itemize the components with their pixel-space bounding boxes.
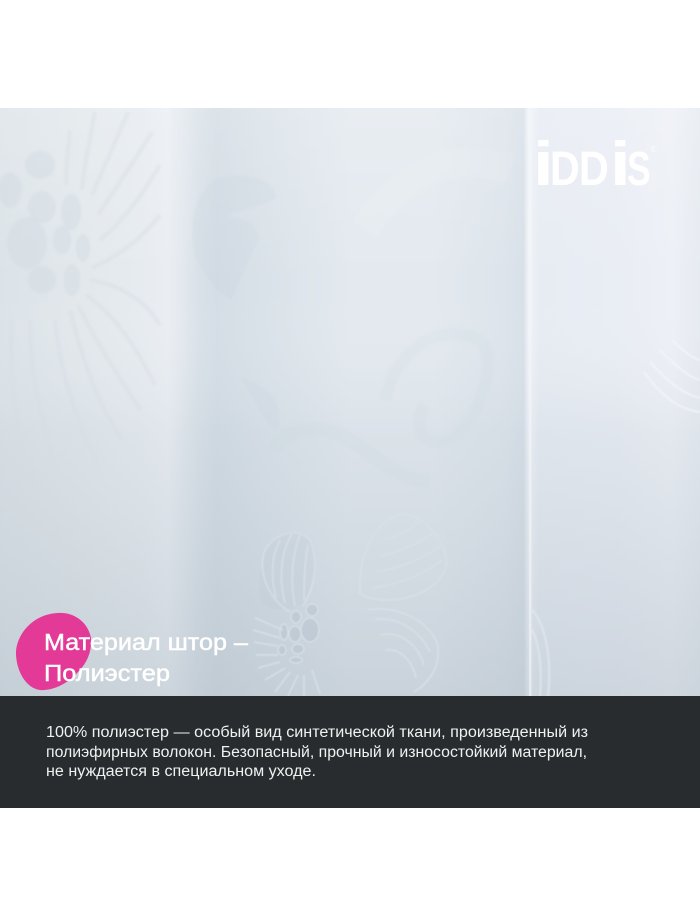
- description text: 100% полиэстер — особый вид синтетической ткани, произведенный из: [46, 724, 588, 741]
- panel: dark description band: [0, 696, 700, 808]
- flower pattern: lower orchid: [253, 514, 447, 696]
- fold highlight line: [529, 108, 532, 696]
- logo: IDDIS: S: [627, 142, 651, 195]
- description text: [46, 724, 588, 780]
- flower pattern: middle leaf: [192, 176, 280, 430]
- heading: Материал штор –: [44, 629, 248, 655]
- description text: не нуждается в специальном уходе.: [46, 763, 316, 780]
- heading: Полиэстер: [44, 660, 170, 686]
- logo: IDDIS: D: [579, 142, 609, 196]
- logo: IDDIS: i: [533, 129, 554, 199]
- panel: curtain fabric photo: [0, 108, 700, 696]
- description text: полиэфирных волокон. Безопасный, прочный и износостойкий материал,: [46, 744, 587, 761]
- accent: pink blob: [16, 613, 91, 690]
- logo: IDDIS: i: [610, 129, 631, 199]
- heading: [44, 629, 248, 686]
- flower pattern: large left bloom: [0, 112, 160, 495]
- flower pattern: right edge bloom: [532, 340, 700, 696]
- flower pattern: centre swirl: [275, 162, 510, 482]
- logo: IDDIS: ®: [650, 144, 657, 154]
- logo: IDDIS: D: [550, 142, 580, 196]
- logo: IDDIS: [533, 129, 657, 199]
